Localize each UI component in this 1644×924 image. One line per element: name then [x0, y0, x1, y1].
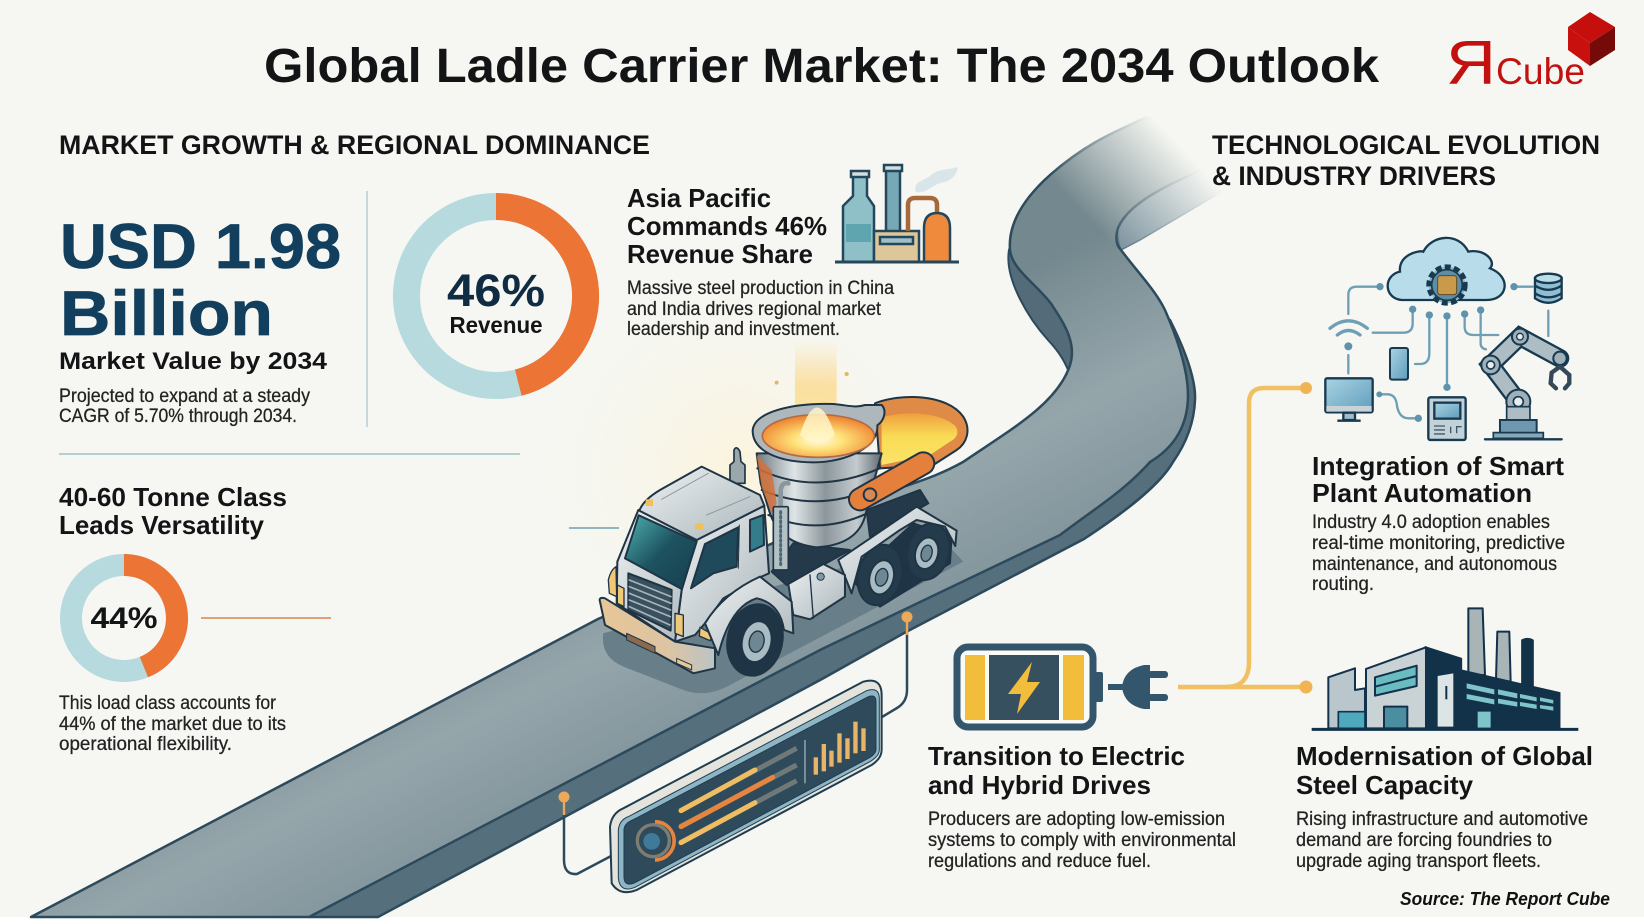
windshield [625, 515, 697, 589]
cab front [617, 510, 697, 642]
phone [1390, 348, 1408, 380]
grille [628, 573, 672, 631]
load class description: operational flexibility. [59, 734, 232, 755]
subsection: tonne class: Leads Versatility [59, 510, 265, 540]
exhaust stacks [730, 448, 745, 483]
market value stat: Market Value by 2034 [59, 348, 328, 375]
robot arm [1481, 329, 1569, 439]
illustration: ladle carrier truck [600, 340, 968, 693]
section heading: technological evolution: TECHNOLOGICAL EVOLUTION [1212, 130, 1600, 160]
market value stat: CAGR of 5.70% through 2034. [59, 406, 297, 427]
text block: smart plant automation: routing. [1312, 574, 1374, 595]
load class description: 44% of the market due to its [59, 714, 286, 735]
text block: electric and hybrid drives [928, 741, 1236, 872]
text block: steel capacity modernisation: upgrade aging transport fleets. [1296, 851, 1541, 872]
winding road [31, 100, 1270, 917]
asia pacific text block: Revenue Share [627, 239, 813, 269]
market value stat: Projected to expand at a steady [59, 386, 310, 407]
load class description [59, 693, 286, 755]
market value stat [59, 212, 341, 427]
subsection: tonne class: 40-60 Tonne Class [59, 482, 287, 512]
cab roof [639, 467, 764, 540]
market value stat: Billion [60, 279, 273, 349]
glow beam [795, 340, 837, 430]
section heading: market growth: MARKET GROWTH & REGIONAL DOMINANCE [59, 130, 650, 160]
control device [1428, 397, 1466, 440]
text block: electric and hybrid drives: regulations and reduce fuel. [928, 851, 1151, 872]
text block: steel capacity modernisation: Steel Capacity [1296, 770, 1474, 800]
text block: electric and hybrid drives: systems to comply with environmental [928, 830, 1236, 851]
section heading: technological evolution: & INDUSTRY DRIVERS [1212, 161, 1496, 191]
donut chart: 46% revenue: Revenue [450, 312, 542, 338]
subsection: tonne class [59, 482, 287, 540]
monitor [1325, 378, 1373, 421]
asia pacific text block: Asia Pacific [627, 183, 771, 213]
gear and chip [1429, 267, 1465, 303]
ladle body [757, 453, 882, 547]
title: Global Ladle Carrier Market: The 2034 Outlook [264, 40, 1379, 93]
text block: smart plant automation [1312, 451, 1565, 595]
text block: smart plant automation: Industry 4.0 adoption enables [1312, 512, 1550, 533]
ladle rim and molten metal [753, 404, 884, 462]
text block: steel capacity modernisation: Rising infrastructure and automotive [1296, 809, 1588, 830]
truck shadow [603, 540, 963, 693]
text block: electric and hybrid drives: Producers are adopting low-emission [928, 809, 1225, 830]
asia pacific text block: Massive steel production in China [627, 278, 894, 299]
text block: steel capacity modernisation: demand are forcing foundries to [1296, 830, 1552, 851]
fuel tank [788, 564, 845, 619]
asia pacific text block: leadership and investment. [627, 319, 840, 340]
text block: electric and hybrid drives: Transition to Electric [928, 741, 1185, 771]
connector: yellow energy line [1178, 382, 1312, 694]
database [1535, 274, 1562, 303]
asia pacific text block: Commands 46% [627, 211, 827, 241]
connector: road pin to dashboard [558, 612, 912, 874]
text block: electric and hybrid drives: and Hybrid Drives [928, 770, 1151, 800]
donut chart: 46% revenue [406, 206, 586, 386]
text block: smart plant automation: Plant Automation [1312, 478, 1532, 508]
exhaust with heat shield [773, 483, 788, 570]
headlights [608, 567, 683, 637]
ladle arm [860, 463, 923, 499]
donut chart: 44% load class [71, 565, 177, 671]
text block: smart plant automation: real-time monitoring, predictive [1312, 533, 1565, 554]
icon: plug [1108, 665, 1168, 709]
icon: battery [957, 647, 1103, 727]
chassis behind ladle [867, 490, 928, 537]
icon: small factory [835, 165, 959, 262]
front wheel and fender [721, 599, 789, 681]
logo: RCube [1446, 12, 1615, 98]
text block: steel capacity modernisation [1296, 741, 1593, 872]
orange ladle handle ring [875, 397, 968, 468]
donut chart: 46% revenue: 46% [447, 265, 545, 316]
donut chart: 44% load class: 44% [90, 602, 158, 635]
icon: large factory [1312, 608, 1578, 729]
bumper [600, 598, 715, 673]
text block: smart plant automation: maintenance, and autonomous [1312, 554, 1557, 575]
side windows [691, 527, 738, 588]
logo: RCube: Я [1446, 29, 1496, 98]
panel: market growth and regional dominance [59, 130, 959, 755]
rear wheels and fender [852, 523, 952, 607]
load class description: This load class accounts for [59, 693, 277, 714]
text block: smart plant automation: Integration of Smart [1312, 451, 1564, 481]
asia pacific text block: and India drives regional market [627, 299, 882, 320]
cab side [675, 506, 769, 642]
asia pacific text block [627, 183, 894, 340]
source note: Source: The Report Cube [1400, 888, 1610, 909]
market value stat: USD 1.98 [60, 212, 341, 282]
logo: RCube: Cube [1496, 51, 1585, 92]
section heading: technological evolution [1212, 130, 1600, 191]
dashboard panel [610, 681, 882, 892]
panel: technological evolution [928, 130, 1600, 872]
text block: steel capacity modernisation: Modernisation of Global [1296, 741, 1593, 771]
network connectors [1330, 283, 1548, 422]
cloud [1388, 238, 1505, 300]
icon: smart plant network [1325, 238, 1569, 440]
